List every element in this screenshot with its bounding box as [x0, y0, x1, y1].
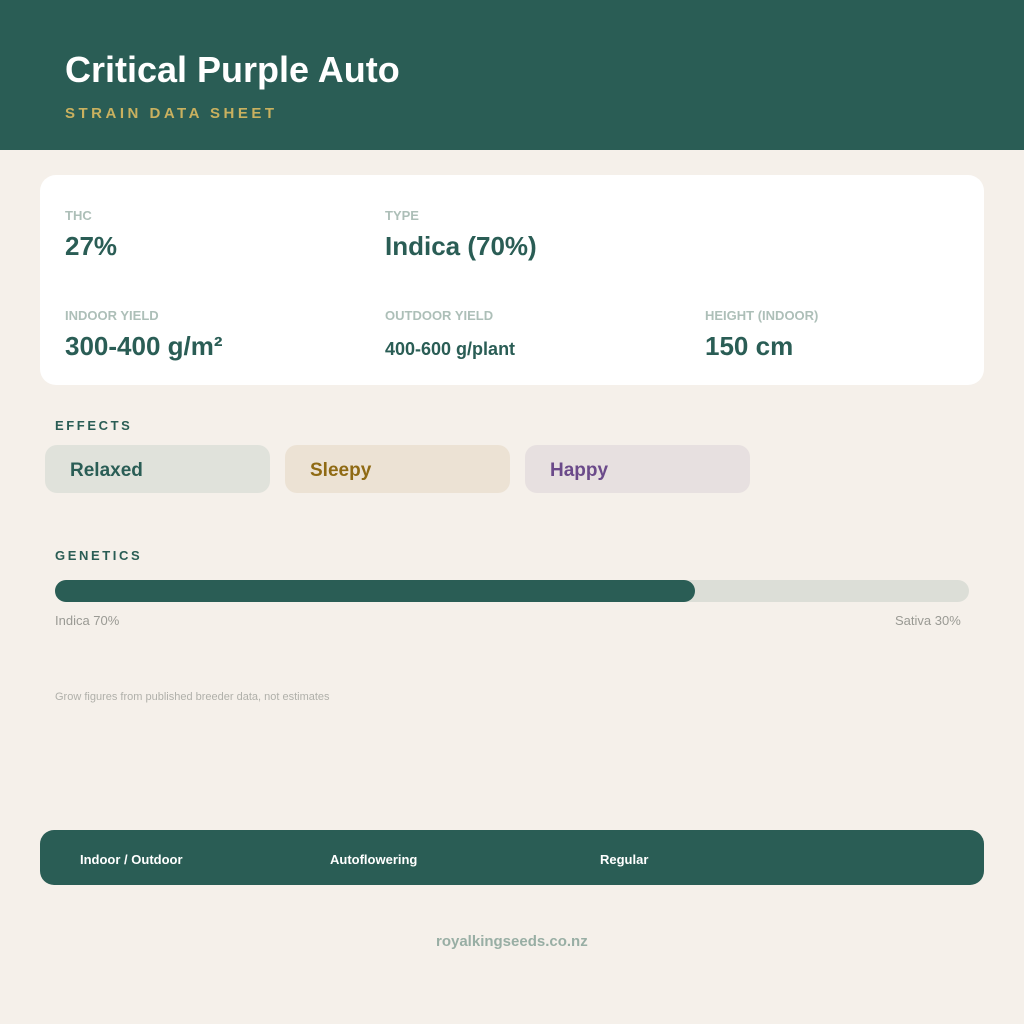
stat: type: TYPE — [385, 208, 419, 223]
header band — [0, 0, 1024, 150]
stat: indoor yield — [65, 308, 223, 361]
stat: height: HEIGHT (INDOOR) — [705, 308, 818, 323]
panel: stats card — [40, 175, 984, 385]
tag: indoor / outdoor: Indoor / Outdoor — [80, 852, 183, 867]
website: royalkingseeds.co.nz — [436, 933, 588, 950]
label: indica: Indica 70% — [55, 613, 119, 628]
footer bar — [40, 830, 984, 885]
stat: indoor yield: 300-400 g/m² — [65, 331, 223, 361]
footnote: Grow figures from published breeder data, not estimates — [55, 691, 330, 703]
tag: autoflowering: Autoflowering — [330, 852, 417, 867]
effect pill: happy: Happy — [550, 460, 608, 481]
stat: outdoor yield: OUTDOOR YIELD — [385, 308, 493, 323]
heading: effects: EFFECTS — [55, 418, 132, 433]
effect pill: sleepy — [285, 445, 510, 493]
effect pill: relaxed: Relaxed — [70, 460, 143, 481]
heading: genetics: GENETICS — [55, 548, 142, 563]
effect pill: happy — [525, 445, 750, 493]
stat: type: Indica (70%) — [385, 231, 537, 261]
stat: outdoor yield — [385, 308, 515, 359]
stat: type — [385, 208, 537, 261]
stat: outdoor yield: 400-600 g/plant — [385, 339, 515, 359]
genetics bar — [55, 580, 969, 602]
effect pill: relaxed — [45, 445, 270, 493]
tag: regular: Regular — [600, 852, 648, 867]
title: Critical Purple Auto — [65, 49, 400, 90]
label: sativa: Sativa 30% — [895, 613, 961, 628]
stat: THC: THC — [65, 208, 92, 223]
effect pill: sleepy: Sleepy — [310, 460, 371, 481]
stat: height — [705, 308, 818, 361]
stat: height: 150 cm — [705, 331, 793, 361]
subtitle: STRAIN DATA SHEET — [65, 105, 278, 122]
indica share — [55, 580, 695, 602]
stat: indoor yield: INDOOR YIELD — [65, 308, 159, 323]
stat: THC — [65, 208, 117, 261]
stat: THC: 27% — [65, 231, 117, 261]
